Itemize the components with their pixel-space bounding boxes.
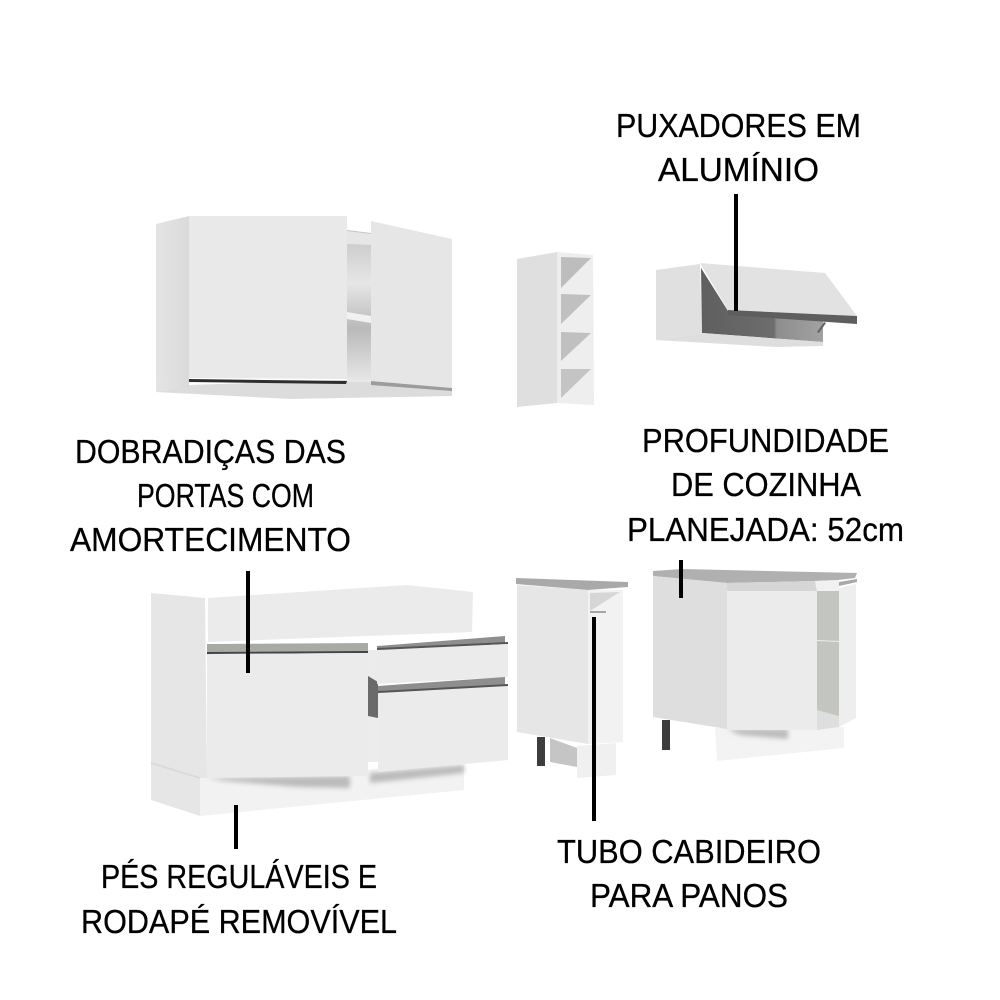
label: towel rail: PARA PANOS	[590, 877, 788, 914]
label: aluminium handles	[616, 107, 861, 188]
label: adjustable feet: RODAPÉ REMOVÍVEL	[81, 903, 397, 940]
label: kitchen depth: PLANEJADA: 52cm	[627, 511, 904, 548]
cabinet: upper two-door wall unit	[156, 216, 452, 399]
label: kitchen depth	[627, 422, 904, 548]
label: door hinges: AMORTECIMENTO	[70, 521, 351, 558]
cabinet: narrow base unit with towel rail	[516, 578, 628, 778]
cabinet: base unit with door and drawers	[151, 585, 508, 816]
label: towel rail	[557, 833, 821, 914]
leader line: kitchen depth	[679, 560, 683, 598]
leader line: aluminium handles	[734, 194, 738, 311]
label: adjustable feet: PÉS REGULÁVEIS E	[101, 858, 377, 895]
label: door hinges	[70, 433, 351, 558]
leader line: towel rail	[592, 617, 596, 821]
label: aluminium handles: PUXADORES EM	[616, 107, 861, 144]
label: door hinges: DOBRADIÇAS DAS	[75, 433, 346, 470]
leader line: door hinges	[246, 571, 250, 673]
label: kitchen depth: DE COZINHA	[671, 466, 861, 503]
cabinet: flip-up wall unit	[656, 263, 857, 347]
cabinet: narrow open shelf tower	[517, 252, 594, 407]
leader line: adjustable feet	[234, 805, 238, 849]
label: towel rail: TUBO CABIDEIRO	[557, 833, 821, 870]
label: door hinges: PORTAS COM	[137, 477, 314, 514]
label: adjustable feet	[81, 858, 397, 940]
label: kitchen depth: PROFUNDIDADE	[642, 422, 889, 459]
label: aluminium handles: ALUMÍNIO	[658, 151, 819, 188]
cabinet: corner base unit	[653, 569, 857, 761]
